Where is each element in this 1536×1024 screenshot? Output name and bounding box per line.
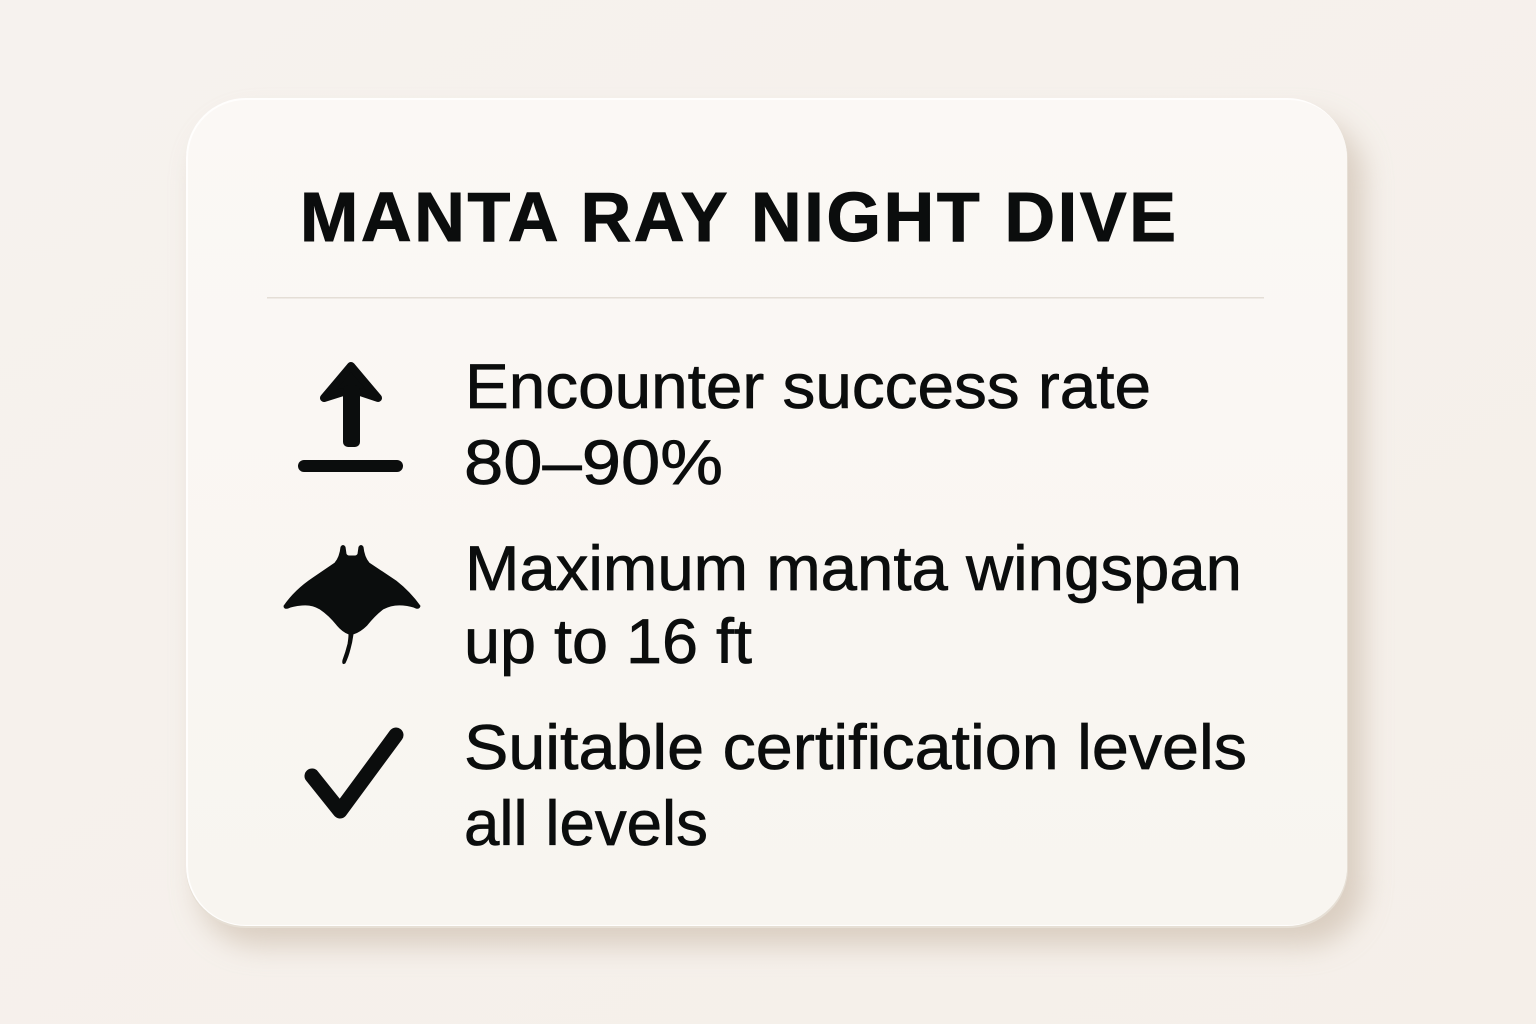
text: encounter success rate: Encounter success rate — [465, 352, 1151, 422]
panel: card — [186, 98, 1348, 928]
title: MANTA RAY NIGHT DIVE — [300, 178, 1176, 256]
icon: upward arrow over line — [298, 366, 403, 472]
text: manta wingspan: up to 16 ft — [464, 607, 752, 677]
card shadow — [198, 118, 1364, 946]
text: manta wingspan: Maximum manta wingspan — [465, 534, 1242, 604]
icon: check mark — [312, 735, 396, 811]
text: certification levels: Suitable certification levels — [464, 713, 1247, 783]
row: encounter success rate — [298, 352, 1151, 498]
text: encounter success rate: 80–90% — [464, 428, 723, 498]
icon: manta ray — [284, 546, 420, 664]
row: certification levels — [312, 713, 1247, 859]
row: manta wingspan — [284, 534, 1242, 677]
text: encounter success rate — [464, 352, 1151, 498]
text: certification levels — [464, 713, 1247, 859]
text: certification levels: all levels — [464, 789, 708, 859]
text: manta wingspan — [464, 534, 1242, 677]
